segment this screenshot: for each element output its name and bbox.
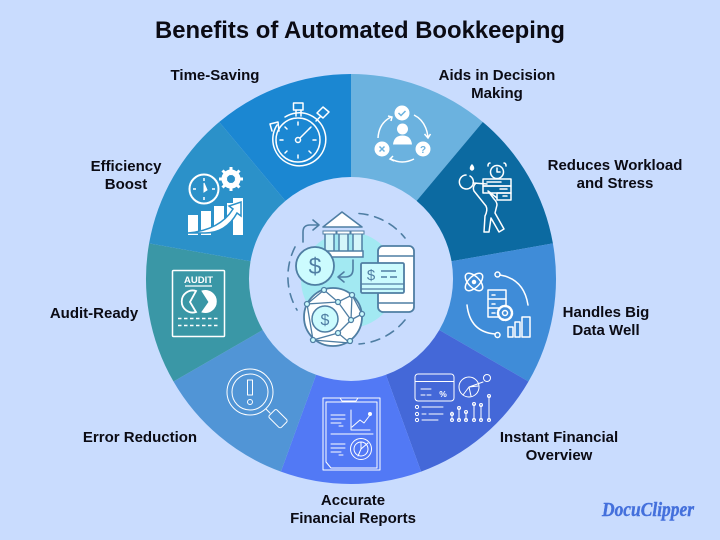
- label: Accurate Financial Reports: Accurate: [321, 492, 385, 509]
- icon: central finance illustration: [288, 212, 414, 346]
- icon: financial overview dashboard: [415, 374, 490, 422]
- segment: Instant Financial Overview: [386, 330, 528, 472]
- segment: Audit-Ready: [146, 243, 263, 382]
- label: Handles Big Data Well: Data Well: [572, 322, 640, 339]
- icon: big data server: [462, 270, 530, 338]
- segment: Aids in Decision Making: [351, 74, 483, 201]
- icon: central finance illustration: $: [367, 267, 376, 284]
- segment: Accurate Financial Reports: [281, 375, 421, 484]
- icon: decision cycle: [374, 106, 430, 162]
- label: Aids in Decision Making: Aids in Decision: [439, 67, 555, 84]
- label: Efficiency Boost: Efficiency: [91, 158, 162, 175]
- label: Accurate Financial Reports: Financial Reports: [290, 510, 416, 527]
- label: Handles Big Data Well: Handles Big: [563, 304, 649, 321]
- label: Efficiency Boost: Boost: [105, 176, 147, 193]
- label: Instant Financial Overview: Overview: [526, 447, 593, 464]
- icon: financial report document: [323, 398, 380, 470]
- label: Instant Financial Overview: Instant Financial: [500, 429, 618, 446]
- icon: decision cycle: ?: [420, 145, 426, 156]
- icon: efficiency clock and growth: [188, 167, 243, 235]
- label: Error Reduction: Error Reduction: [83, 429, 197, 446]
- title: Benefits of Automated Bookkeeping: [155, 17, 565, 44]
- segment: Efficiency Boost: [149, 122, 285, 261]
- icon: audit report: AUDIT: [184, 275, 213, 286]
- segment: Time-Saving: [219, 74, 351, 201]
- segment: Error Reduction: [174, 330, 316, 472]
- icon: magnifier with exclamation: [227, 369, 288, 429]
- icon: audit report: [172, 270, 224, 336]
- icon: financial overview dashboard: %: [439, 389, 447, 399]
- icon: overloaded worker: [459, 163, 511, 232]
- logo: DocuClipper: DocuClipper: [601, 499, 694, 521]
- label: Audit-Ready: Audit-Ready: [50, 305, 139, 322]
- donut chart: [146, 74, 556, 484]
- label: Reduces Workload and Stress: and Stress: [577, 175, 653, 192]
- segment: Reduces Workload and Stress: [417, 122, 553, 261]
- icon: stopwatch: [270, 103, 329, 166]
- label: Time-Saving: Time-Saving: [171, 67, 259, 84]
- label: Reduces Workload and Stress: Reduces Workload: [548, 157, 682, 174]
- label: Aids in Decision Making: Making: [471, 85, 523, 102]
- icon: central finance illustration: $: [321, 312, 330, 329]
- icon: central finance illustration: $: [309, 253, 322, 279]
- segment: Handles Big Data Well: [439, 243, 556, 382]
